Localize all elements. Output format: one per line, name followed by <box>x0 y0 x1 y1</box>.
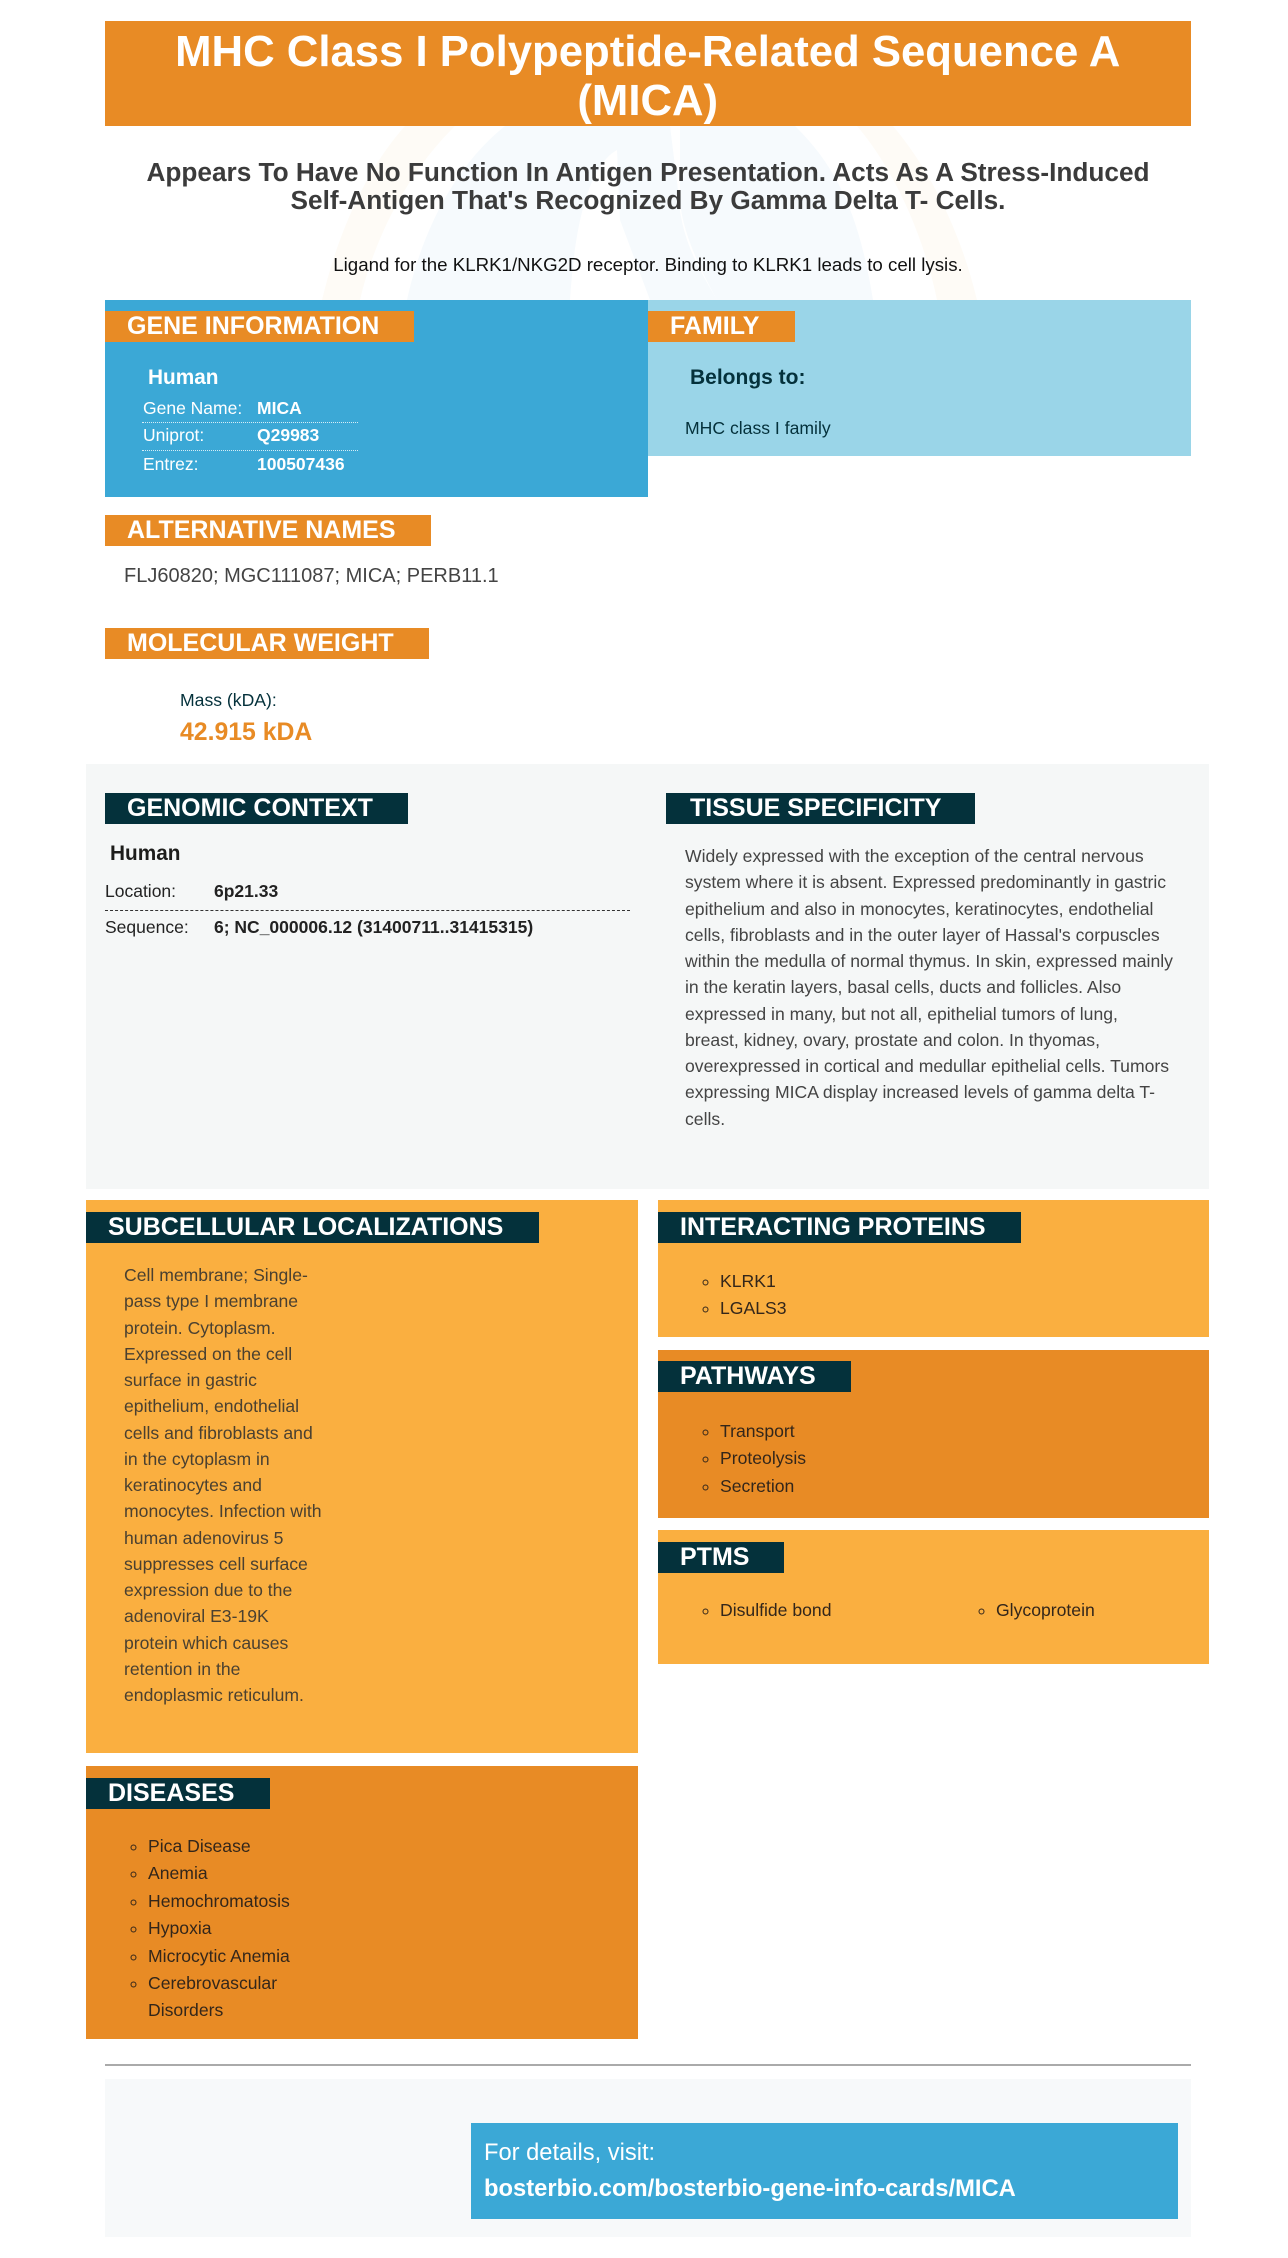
diseases list: Pica Disease <box>148 1836 251 1856</box>
panel: gene information: Q29983 <box>257 425 319 445</box>
entrez row <box>143 454 345 474</box>
title banner: (MICA) <box>577 76 718 125</box>
callout: details link <box>471 2123 1178 2219</box>
tissue specificity text: overexpressed in cortical and medullar epithelial cells. Tumors <box>685 1056 1169 1076</box>
subcellular text: keratinocytes and <box>124 1475 262 1495</box>
diseases list: Hemochromatosis <box>148 1891 290 1911</box>
interacting proteins list: KLRK1 <box>720 1271 776 1291</box>
mass label: Mass (kDA): <box>180 690 277 710</box>
ptms list left: Disulfide bond <box>720 1600 832 1620</box>
entrez row: Entrez: <box>143 454 198 474</box>
uniprot row: Uniprot: <box>143 425 204 445</box>
heading: interacting proteins: INTERACTING PROTEINS <box>680 1213 986 1241</box>
subcellular text: retention in the <box>124 1659 240 1679</box>
heading: ptms <box>658 1542 784 1573</box>
subcellular text: epithelium, endothelial <box>124 1396 299 1416</box>
tissue specificity text: cells. <box>685 1108 725 1128</box>
heading: alternative names: ALTERNATIVE NAMES <box>127 516 396 544</box>
panel: gene information <box>105 300 648 497</box>
species label: Human <box>110 842 180 865</box>
heading: pathways: PATHWAYS <box>680 1362 816 1390</box>
subtitle: Appears To Have No Function In Antigen Presentation. Acts As A Stress-Induced <box>146 157 1150 187</box>
diseases list: Cerebrovascular <box>148 1973 277 1993</box>
panel: pathways <box>658 1350 1209 1518</box>
location row: Location: <box>105 881 176 901</box>
tissue specificity text: cells, fibroblasts and in the outer layer of Hassal's corpuscles <box>685 925 1160 945</box>
panel: subcellular localizations <box>86 1200 638 1753</box>
interacting proteins list: LGALS3 <box>720 1298 787 1318</box>
belongs to label: Belongs to: <box>690 366 806 389</box>
tissue specificity text: system where it is absent. Expressed predominantly in gastric <box>685 872 1166 892</box>
heading: ptms: PTMS <box>680 1543 749 1571</box>
tissue specificity text: in the keratin layers, basal cells, ducts and follicles. Also <box>685 977 1121 997</box>
tissue specificity text: breast, kidney, ovary, prostate and colon. In thyomas, <box>685 1030 1100 1050</box>
pathways list: Secretion <box>720 1476 794 1496</box>
location row <box>105 881 278 901</box>
pathways list: Transport <box>720 1421 795 1441</box>
heading: tissue specificity: TISSUE SPECIFICITY <box>690 794 941 822</box>
subcellular text: endoplasmic reticulum. <box>124 1685 304 1705</box>
panel: genomic context and tissue specificity <box>86 764 1209 1189</box>
panel: genomic context and tissue specificity: 6; NC_000006.12 (31400711..31415315) <box>214 917 533 937</box>
sequence row: Sequence: <box>105 917 189 937</box>
subcellular text: suppresses cell surface <box>124 1554 308 1574</box>
watermark logo <box>322 126 976 300</box>
heading: genomic context: GENOMIC CONTEXT <box>127 794 373 822</box>
tissue specificity text: expressed in many, but not all, epithelial tumors of lung, <box>685 1004 1118 1024</box>
subcellular text: cells and fibroblasts and <box>124 1422 313 1442</box>
subcellular text: monocytes. Infection with <box>124 1501 322 1521</box>
subcellular text: in the cytoplasm in <box>124 1449 270 1469</box>
heading: gene information: GENE INFORMATION <box>127 312 379 340</box>
footer panel <box>105 2079 1190 2237</box>
pathways list: Proteolysis <box>720 1448 806 1468</box>
subcellular text: protein. Cytoplasm. <box>124 1318 276 1338</box>
title banner <box>105 21 1190 126</box>
panel: interacting proteins <box>658 1200 1209 1337</box>
heading: family <box>648 311 795 342</box>
panel: genomic context and tissue specificity: 6p21.33 <box>214 881 278 901</box>
alternative names text: FLJ60820; MGC111087; MICA; PERB11.1 <box>124 565 499 587</box>
subcellular text: adenoviral E3-19K <box>124 1606 269 1626</box>
details url: bosterbio.com/bosterbio-gene-info-cards/MICA <box>484 2175 1016 2202</box>
gene name row <box>143 398 302 418</box>
subcellular text <box>124 1265 322 1705</box>
heading: diseases <box>86 1778 270 1809</box>
tissue specificity text: epithelium and also in monocytes, keratinocytes, endothelial <box>685 898 1153 918</box>
heading: diseases: DISEASES <box>108 1779 234 1807</box>
panel: family <box>648 300 1190 456</box>
mass value: 42.915 kDA <box>180 719 312 746</box>
heading: molecular weight: MOLECULAR WEIGHT <box>127 629 394 657</box>
subcellular text: pass type I membrane <box>124 1291 298 1311</box>
diseases list: Anemia <box>148 1863 208 1883</box>
details label: For details, visit: <box>484 2140 655 2166</box>
pathways list <box>702 1421 806 1496</box>
species label: Human <box>148 366 218 389</box>
interacting proteins list <box>702 1271 787 1318</box>
subcellular text: human adenovirus 5 <box>124 1528 283 1548</box>
tissue specificity text: expressing MICA display increased levels of gamma delta T- <box>685 1082 1155 1102</box>
subcellular text: Cell membrane; Single- <box>124 1265 308 1285</box>
panel: ptms <box>658 1530 1209 1664</box>
ptms list right: Glycoprotein <box>996 1600 1095 1620</box>
gene name row: Gene Name: <box>143 398 242 418</box>
subcellular text: Expressed on the cell <box>124 1344 292 1364</box>
panel: gene information: MICA <box>257 398 302 418</box>
heading: pathways <box>658 1361 851 1392</box>
panel: diseases <box>86 1766 638 2039</box>
diseases list: Hypoxia <box>148 1918 212 1938</box>
family text: MHC class I family <box>685 418 831 438</box>
uniprot row <box>143 425 319 445</box>
title banner: MHC Class I Polypeptide-Related Sequence A <box>175 27 1120 76</box>
subcellular text: expression due to the <box>124 1580 292 1600</box>
diseases list: Disorders <box>148 2000 223 2020</box>
subcellular text: protein which causes <box>124 1632 288 1652</box>
heading: subcellular localizations: SUBCELLULAR LOCALIZATIONS <box>108 1213 503 1241</box>
diseases list: Microcytic Anemia <box>148 1946 290 1966</box>
panel: gene information: 100507436 <box>257 454 345 474</box>
tissue specificity text <box>685 846 1173 1128</box>
tissue specificity text: within the medulla of normal thymus. In skin, expressed mainly <box>685 951 1173 971</box>
description: Ligand for the KLRK1/NKG2D receptor. Binding to KLRK1 leads to cell lysis. <box>333 254 963 275</box>
subtitle <box>146 157 1150 215</box>
subcellular text: surface in gastric <box>124 1370 257 1390</box>
tissue specificity text: Widely expressed with the exception of the central nervous <box>685 846 1144 866</box>
sequence row <box>105 917 533 937</box>
subtitle: Self-Antigen That's Recognized By Gamma Delta T- Cells. <box>291 185 1005 215</box>
diseases list <box>130 1836 290 2020</box>
heading: family: FAMILY <box>670 312 759 340</box>
